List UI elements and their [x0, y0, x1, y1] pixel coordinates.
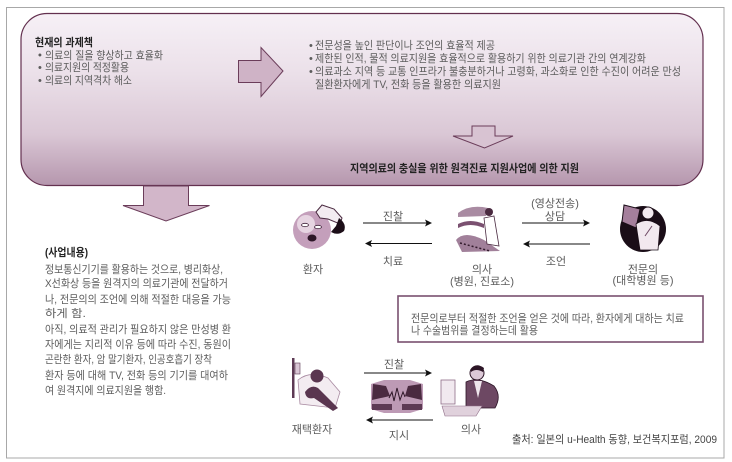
callout: 나 수술범위를 결정하는데 활용 — [411, 323, 538, 337]
source note: 출처: 일본의 u-Health 동향, 보건복지포럼, 2009 — [512, 432, 717, 446]
callout: 전문의로부터 적절한 조언을 얻은 것에 따라, 환자에게 대하는 치료 — [411, 311, 684, 325]
text block: current tasks: 의료의 질을 향상하고 효율화 — [45, 48, 163, 62]
text block: measures: • — [309, 53, 313, 65]
text block: project content — [45, 245, 231, 397]
text block: current tasks: 의료지원의 적정활용 — [45, 60, 129, 74]
callout — [398, 296, 703, 342]
arrow: examination — [363, 222, 431, 224]
icon: specialist — [620, 205, 666, 252]
icon: home patient in bed — [292, 358, 340, 411]
label: specialist: (대학병원 등) — [613, 274, 673, 287]
label: examination home: 진찰 — [384, 358, 404, 371]
label: specialist: 전문의 — [628, 263, 658, 276]
text block: measures: 의료과소 지역 등 교통 인프라가 불충분하거나 고령화, 과소화로 인한 수진이 어려운 만성 — [315, 64, 681, 78]
label: home patient: 재택환자 — [292, 423, 332, 436]
text block: measures: 제한된 인적, 물적 의료지원을 효율적으로 활용하기 위한 의료기관 간의 연계강화 — [315, 51, 646, 65]
arrow: consultation — [522, 222, 589, 224]
text block: current tasks — [35, 35, 163, 87]
icon: doctor with scanner — [456, 207, 500, 252]
arrow: right — [238, 48, 283, 96]
text block: project content: 곤란한 환자, 암 말기환자, 인공호흡기 장착 — [45, 352, 212, 366]
icon: doctor at computer — [441, 365, 498, 416]
arrow: examination home — [364, 372, 431, 374]
text block: measures — [309, 39, 681, 91]
text block: project content: 나, 전문의의 조언에 의해 적절한 대응을 가능 — [45, 292, 231, 306]
text block: measures: • — [309, 66, 313, 78]
text block: current tasks: • — [38, 50, 42, 62]
label: video transfer consultation: 상담 — [545, 210, 565, 223]
label: doctor clinic: 의사 — [472, 263, 492, 276]
label: doctor clinic — [450, 263, 514, 288]
text block: project content: (사업내용) — [45, 245, 88, 259]
arrow: instruction — [367, 419, 433, 421]
icon: telemedicine monitors — [371, 380, 423, 413]
arrow: large down — [123, 186, 210, 221]
text block: project content: 자에게는 지리적 이유 등에 따라 수진, 동원이 — [45, 338, 231, 351]
label: doctor home care: 의사 — [461, 423, 481, 436]
label: video transfer consultation — [531, 197, 579, 223]
arrow: treatment — [366, 242, 432, 244]
heading: regional medicine support: 지역의료의 충실을 위한 원격진료 지원사업에 의한 지원 — [350, 161, 579, 175]
text block: project content: 정보통신기기를 활용하는 것으로, 병리화상, — [45, 262, 223, 276]
text block: current tasks: • — [38, 62, 42, 74]
text block: measures: 전문성을 높인 판단이나 조언의 효율적 제공 — [315, 39, 495, 52]
arrow: small down — [453, 126, 513, 148]
label: advice: 조언 — [546, 255, 566, 268]
label: video transfer consultation: (영상전송) — [531, 197, 579, 210]
text block: project content: 환자 등에 대해 TV, 전화 등의 기기를 대여하 — [45, 368, 228, 382]
text block: project content: X선화상 등을 원격지의 의료기관에 전달하거 — [45, 276, 228, 290]
arrow: advice — [524, 243, 590, 245]
icon: sick patient — [293, 205, 345, 249]
label: specialist — [613, 263, 673, 287]
text block: project content: 아직, 의료적 관리가 필요하지 않은 만성병 환 — [45, 322, 231, 336]
text block: project content: 여 원격지에 의료지원을 행함. — [45, 384, 166, 397]
text block: current tasks: 현재의 과제책 — [35, 35, 93, 49]
label: instruction: 지시 — [389, 429, 409, 442]
label: patient: 환자 — [303, 263, 323, 276]
text block: project content: 하게 함. — [45, 306, 86, 320]
text block: current tasks: 의료의 지역격차 해소 — [45, 73, 132, 87]
label: treatment: 치료 — [383, 255, 403, 268]
label: examination: 진찰 — [383, 210, 403, 223]
panel: current tasks and support — [21, 14, 703, 186]
text block: measures: • — [309, 40, 313, 52]
text block: measures: 질환환자에게 TV, 전화 등을 활용한 의료지원 — [315, 77, 501, 91]
label: doctor clinic: (병원, 진료소) — [450, 275, 514, 288]
text block: current tasks: • — [38, 75, 42, 87]
